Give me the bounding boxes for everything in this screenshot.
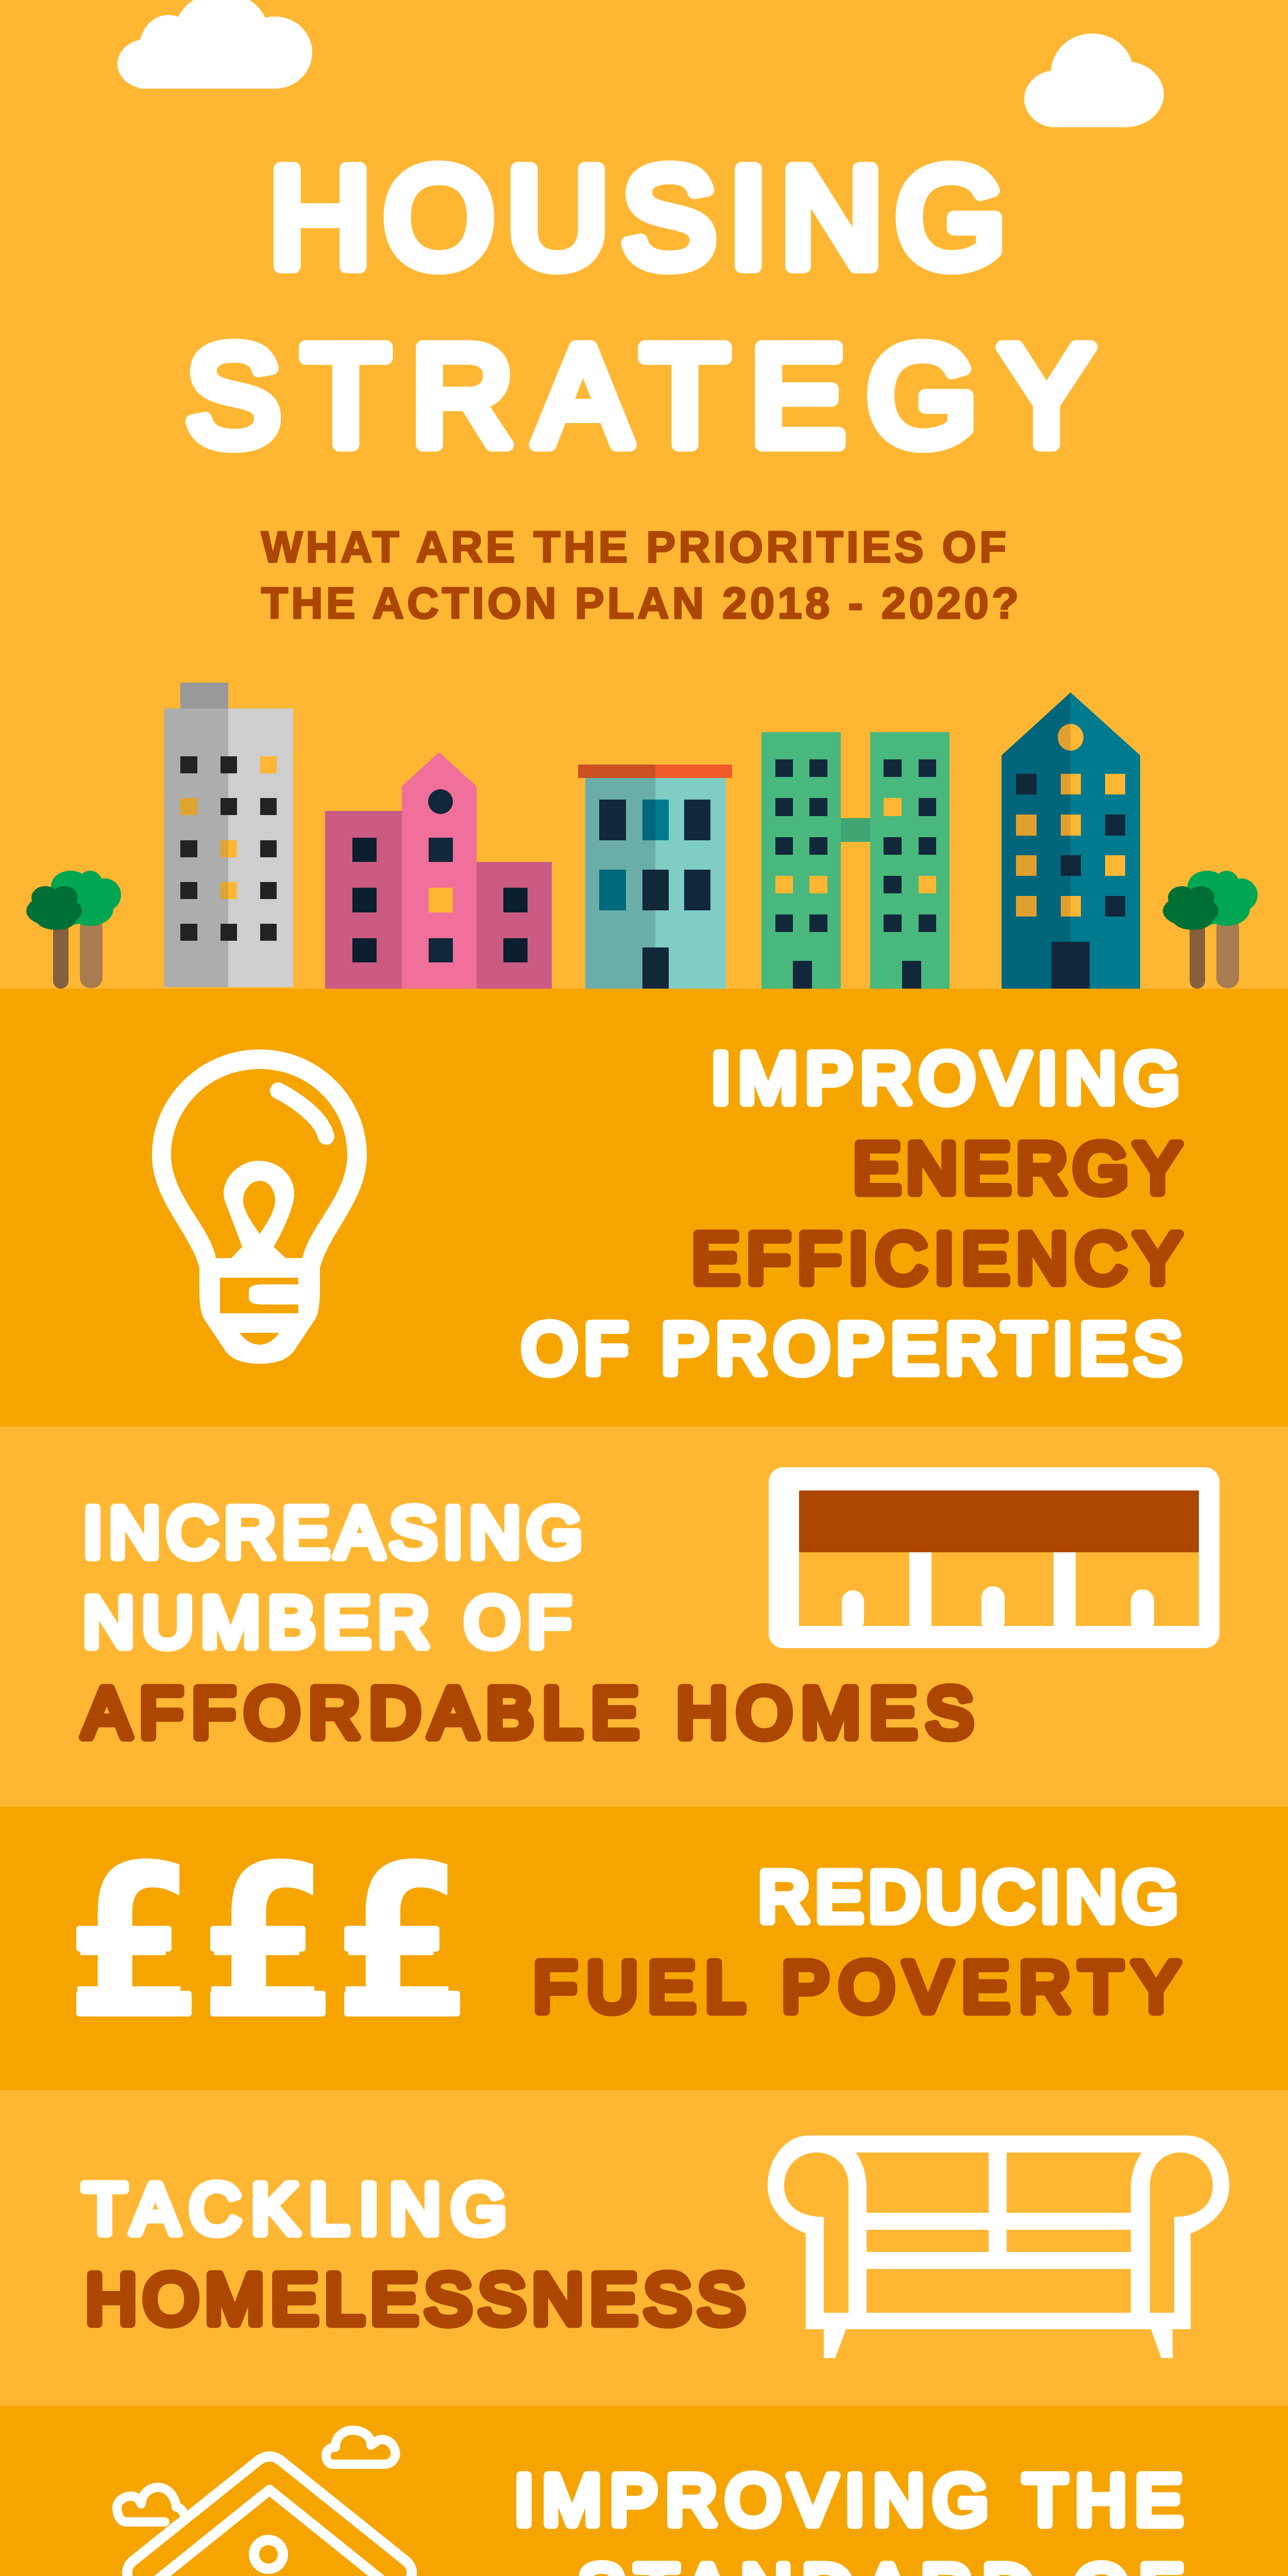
subtitle (261, 523, 1019, 628)
icon: pink building (325, 752, 552, 989)
text: tackling homelessness: HOMELESSNESS (86, 2260, 745, 2339)
text: increasing number of affordable homes: INCREASING (83, 1493, 582, 1572)
text: improving energy efficiency of properties: EFFICIENCY (692, 1219, 1181, 1298)
text: increasing number of affordable homes (83, 1493, 973, 1753)
text: improving the standard of prs properties: IMPROVING THE (514, 2461, 1182, 2540)
icon: homes row (769, 1467, 1219, 1648)
text: tackling homelessness: TACKLING (83, 2170, 506, 2249)
text: improving the standard of prs properties (485, 2461, 1182, 2576)
icon: tree left (26, 871, 121, 989)
text: reducing fuel poverty: REDUCING (758, 1857, 1178, 1937)
icon: cloud right (1024, 33, 1164, 127)
illustration: skyline (26, 683, 1258, 989)
title: HOUSING (269, 139, 1006, 297)
icon: house with fence and clouds (117, 2430, 418, 2576)
text: reducing fuel poverty (533, 1857, 1180, 2027)
icon: light bulb (152, 1049, 367, 1364)
subtitle: THE ACTION PLAN 2018 - 2020? (261, 579, 1019, 628)
icon: sofa (768, 2136, 1229, 2358)
panel: prs properties (0, 2406, 1288, 2576)
text: reducing fuel poverty: FUEL POVERTY (533, 1947, 1180, 2027)
text: increasing number of affordable homes: NUMBER OF (83, 1583, 571, 1662)
panel: tackling homelessness (83, 2136, 1229, 2358)
icon: blue building (1002, 692, 1140, 989)
panel: energy efficiency (0, 989, 1288, 1427)
title: STRATEGY (186, 317, 1094, 475)
icon: pound signs: £££ (67, 1821, 463, 2064)
text: tackling homelessness (83, 2170, 745, 2339)
text: improving energy efficiency of properties: OF PROPERTIES (522, 1309, 1181, 1388)
panel: fuel poverty (0, 1807, 1288, 2090)
icon: grey tower (164, 683, 293, 987)
title (186, 139, 1094, 475)
panel: affordable homes (83, 1467, 1219, 1753)
text: improving energy efficiency of properties: ENERGY (853, 1129, 1181, 1208)
text: improving energy efficiency of properties: IMPROVING (711, 1039, 1179, 1118)
icon: green twin building (761, 732, 950, 989)
icon: cloud left (117, 0, 312, 89)
subtitle: WHAT ARE THE PRIORITIES OF (261, 523, 1006, 572)
text: increasing number of affordable homes: AFFORDABLE HOMES (83, 1673, 973, 1753)
text: improving energy efficiency of properties (522, 1039, 1181, 1388)
panel: header (117, 0, 1164, 628)
icon: teal building (578, 765, 732, 989)
icon: tree right (1163, 871, 1258, 989)
